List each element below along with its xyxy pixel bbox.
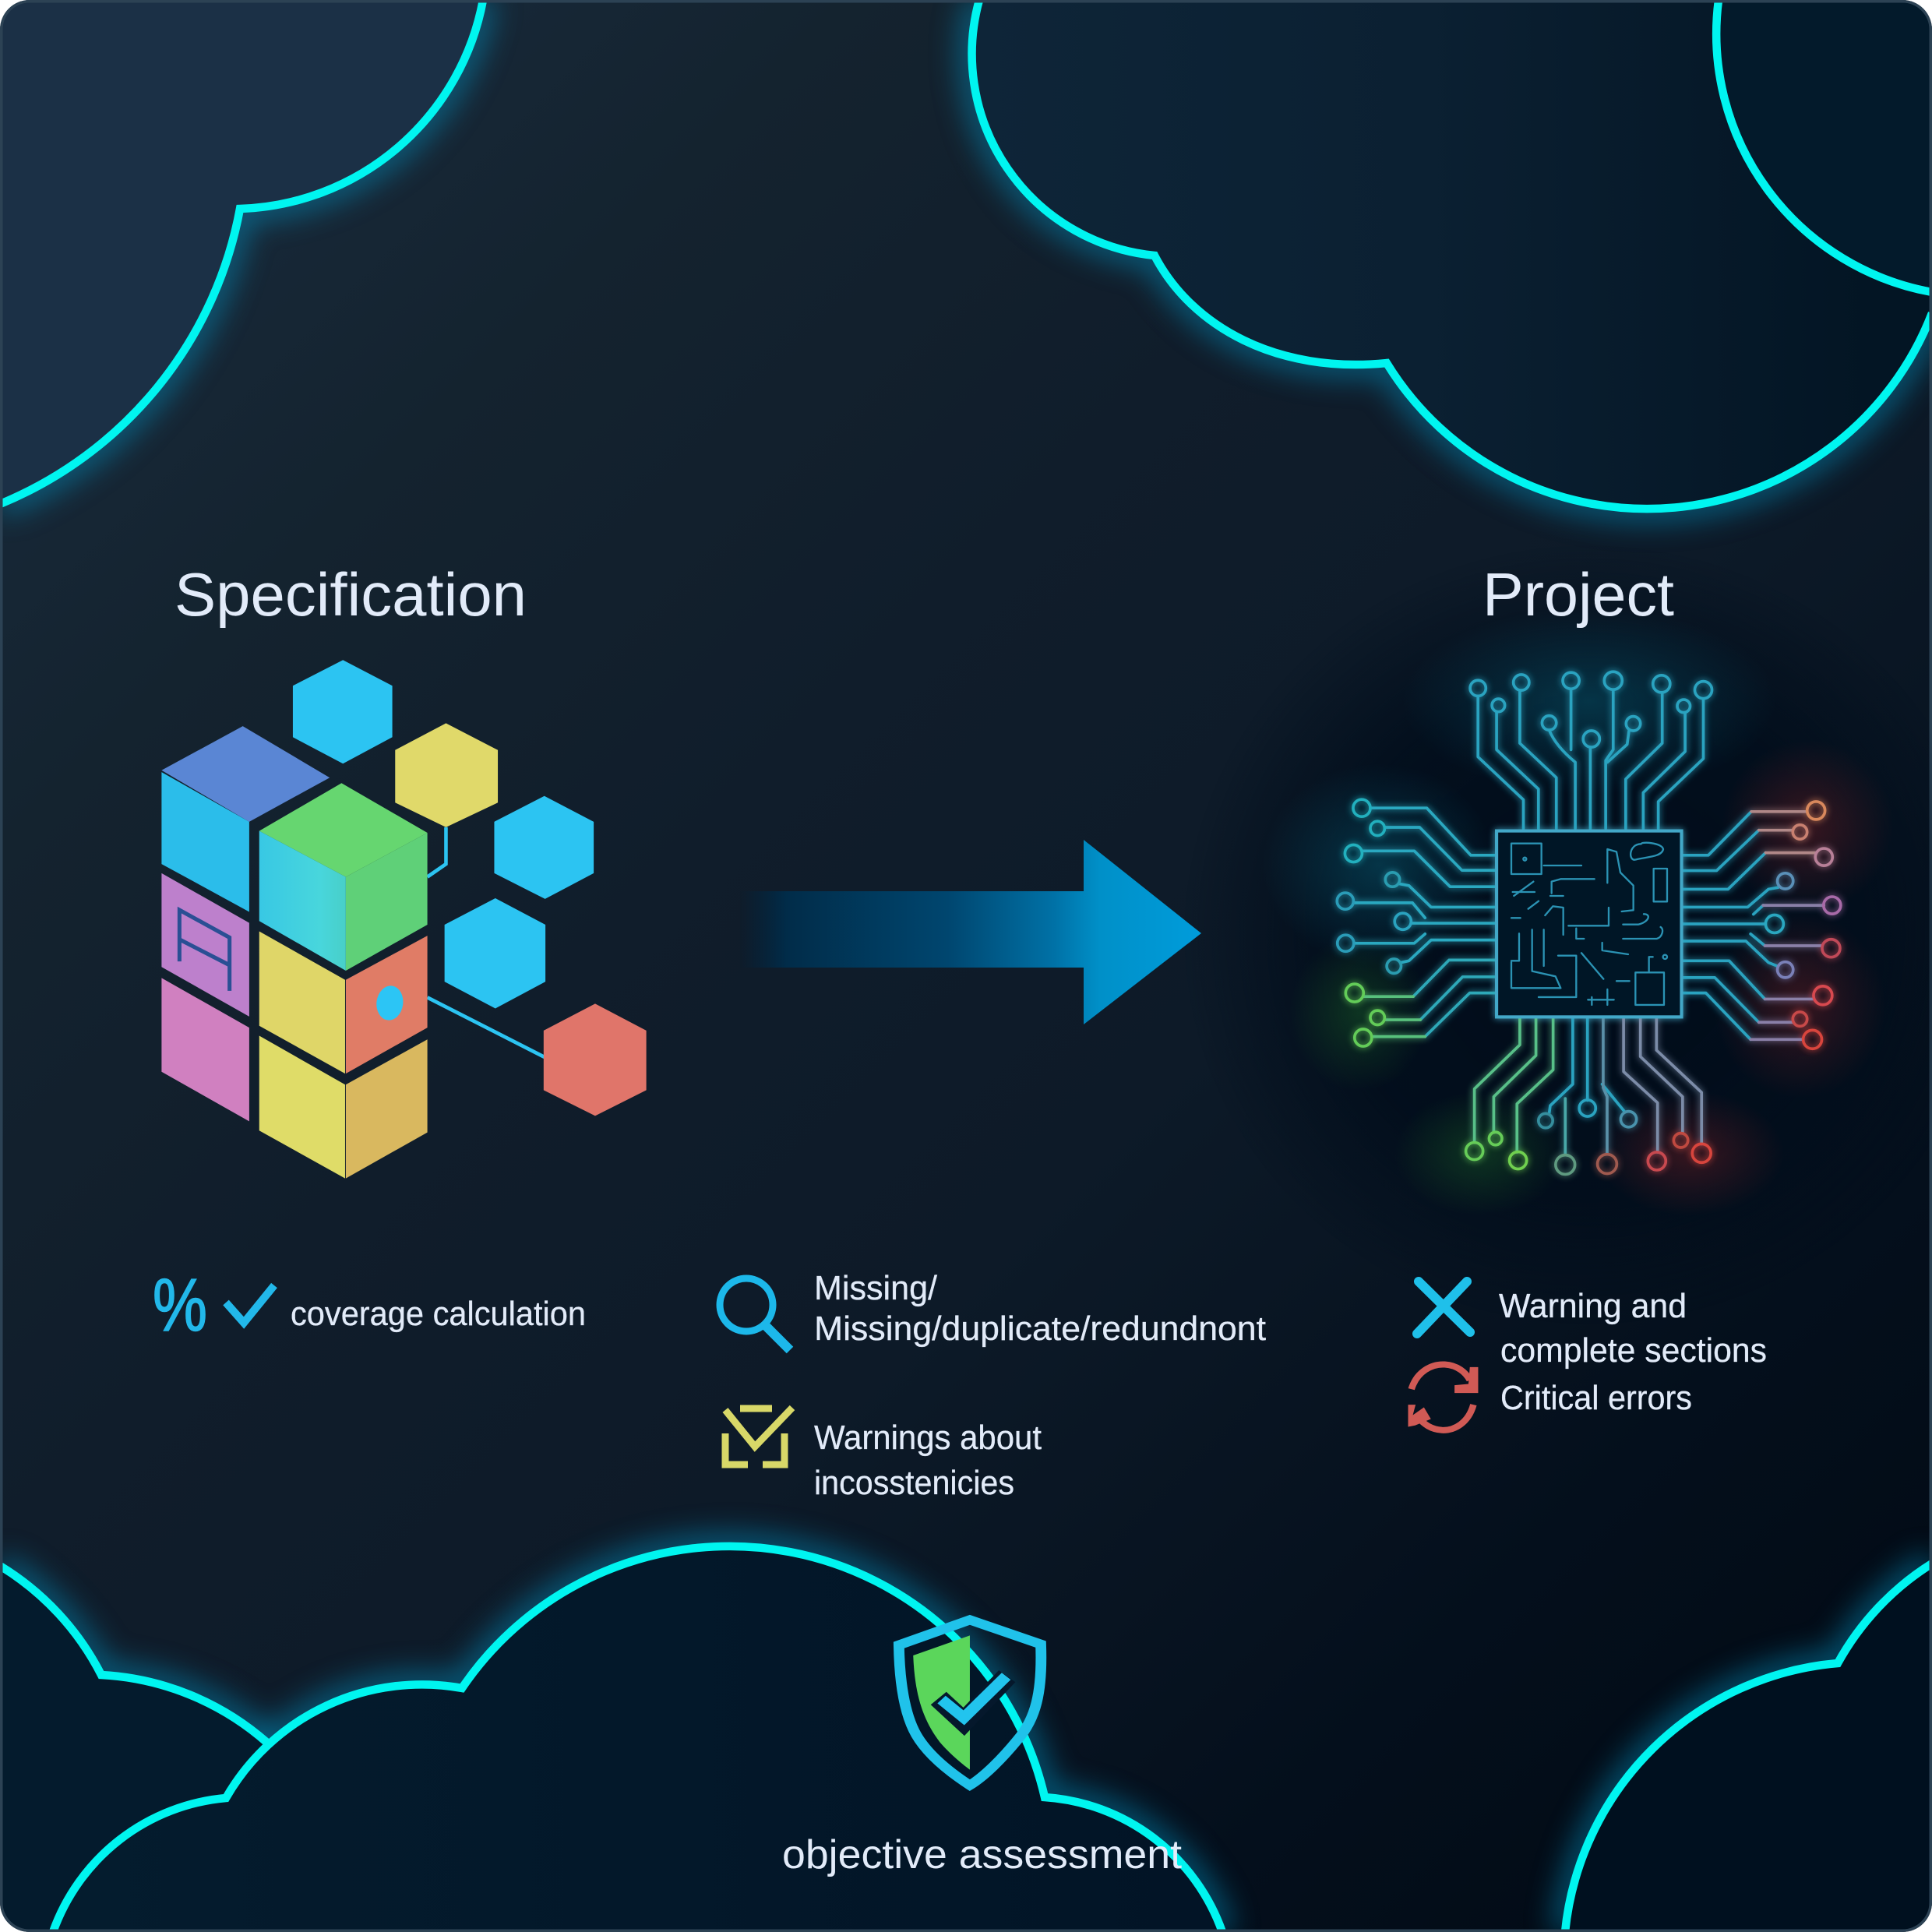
bottom traces [1466,1018,1711,1174]
errors label: Critical errors [1500,1379,1692,1417]
icon: refresh [1408,1364,1478,1430]
heading: Specification: Specification [175,560,527,629]
top traces [1470,672,1712,828]
icon: shield [899,1620,1041,1786]
cloud: top middle [972,0,1932,509]
heading: Project: Project [1482,560,1674,629]
left cube column [161,726,330,1121]
missing item [720,1269,1266,1350]
sections label: complete sections [1500,1331,1767,1370]
cloud: bottom middle large [227,1550,1217,1929]
right cube column [259,783,428,1179]
shield check [939,1676,1007,1722]
cloud: bottom left small [0,1566,267,1932]
hexagons [293,660,647,1116]
chip body [1497,831,1681,1017]
chip background glows [1184,545,1932,1324]
chip inner circuitry [1511,843,1667,1005]
icon: cross [1417,1282,1470,1334]
arrow [740,840,1201,1024]
coverage item [153,1264,586,1347]
caption: objective assessment [782,1832,1183,1877]
icon: check [226,1285,274,1323]
project results [1408,1282,1767,1430]
icon: stacked cubes and hexagons [161,660,647,1179]
shield green half [913,1635,970,1770]
warnings detail label: incosstenicies [814,1464,1014,1502]
coverage label: coverage calculation [291,1295,586,1333]
cloud: bottom right [1565,1564,1932,1932]
warnings item [725,1408,1042,1502]
icon: magnifier [720,1278,790,1350]
warnings label: Warnings about [814,1419,1042,1457]
warning label: Warning and [1499,1287,1687,1325]
connector lines [428,827,545,1057]
icon: percent: % [153,1264,207,1347]
shield outline [899,1620,1041,1786]
missing label: Missing/ [814,1269,938,1307]
left traces [1337,799,1497,1046]
icon: circuit chip [1337,672,1841,1174]
right traces [1681,802,1841,1049]
cloud: top left [0,0,483,504]
cloud: top right [1716,0,1932,292]
icon: envelope check [725,1408,792,1465]
missing detail label: Missing/duplicate/redundnont [814,1310,1266,1348]
